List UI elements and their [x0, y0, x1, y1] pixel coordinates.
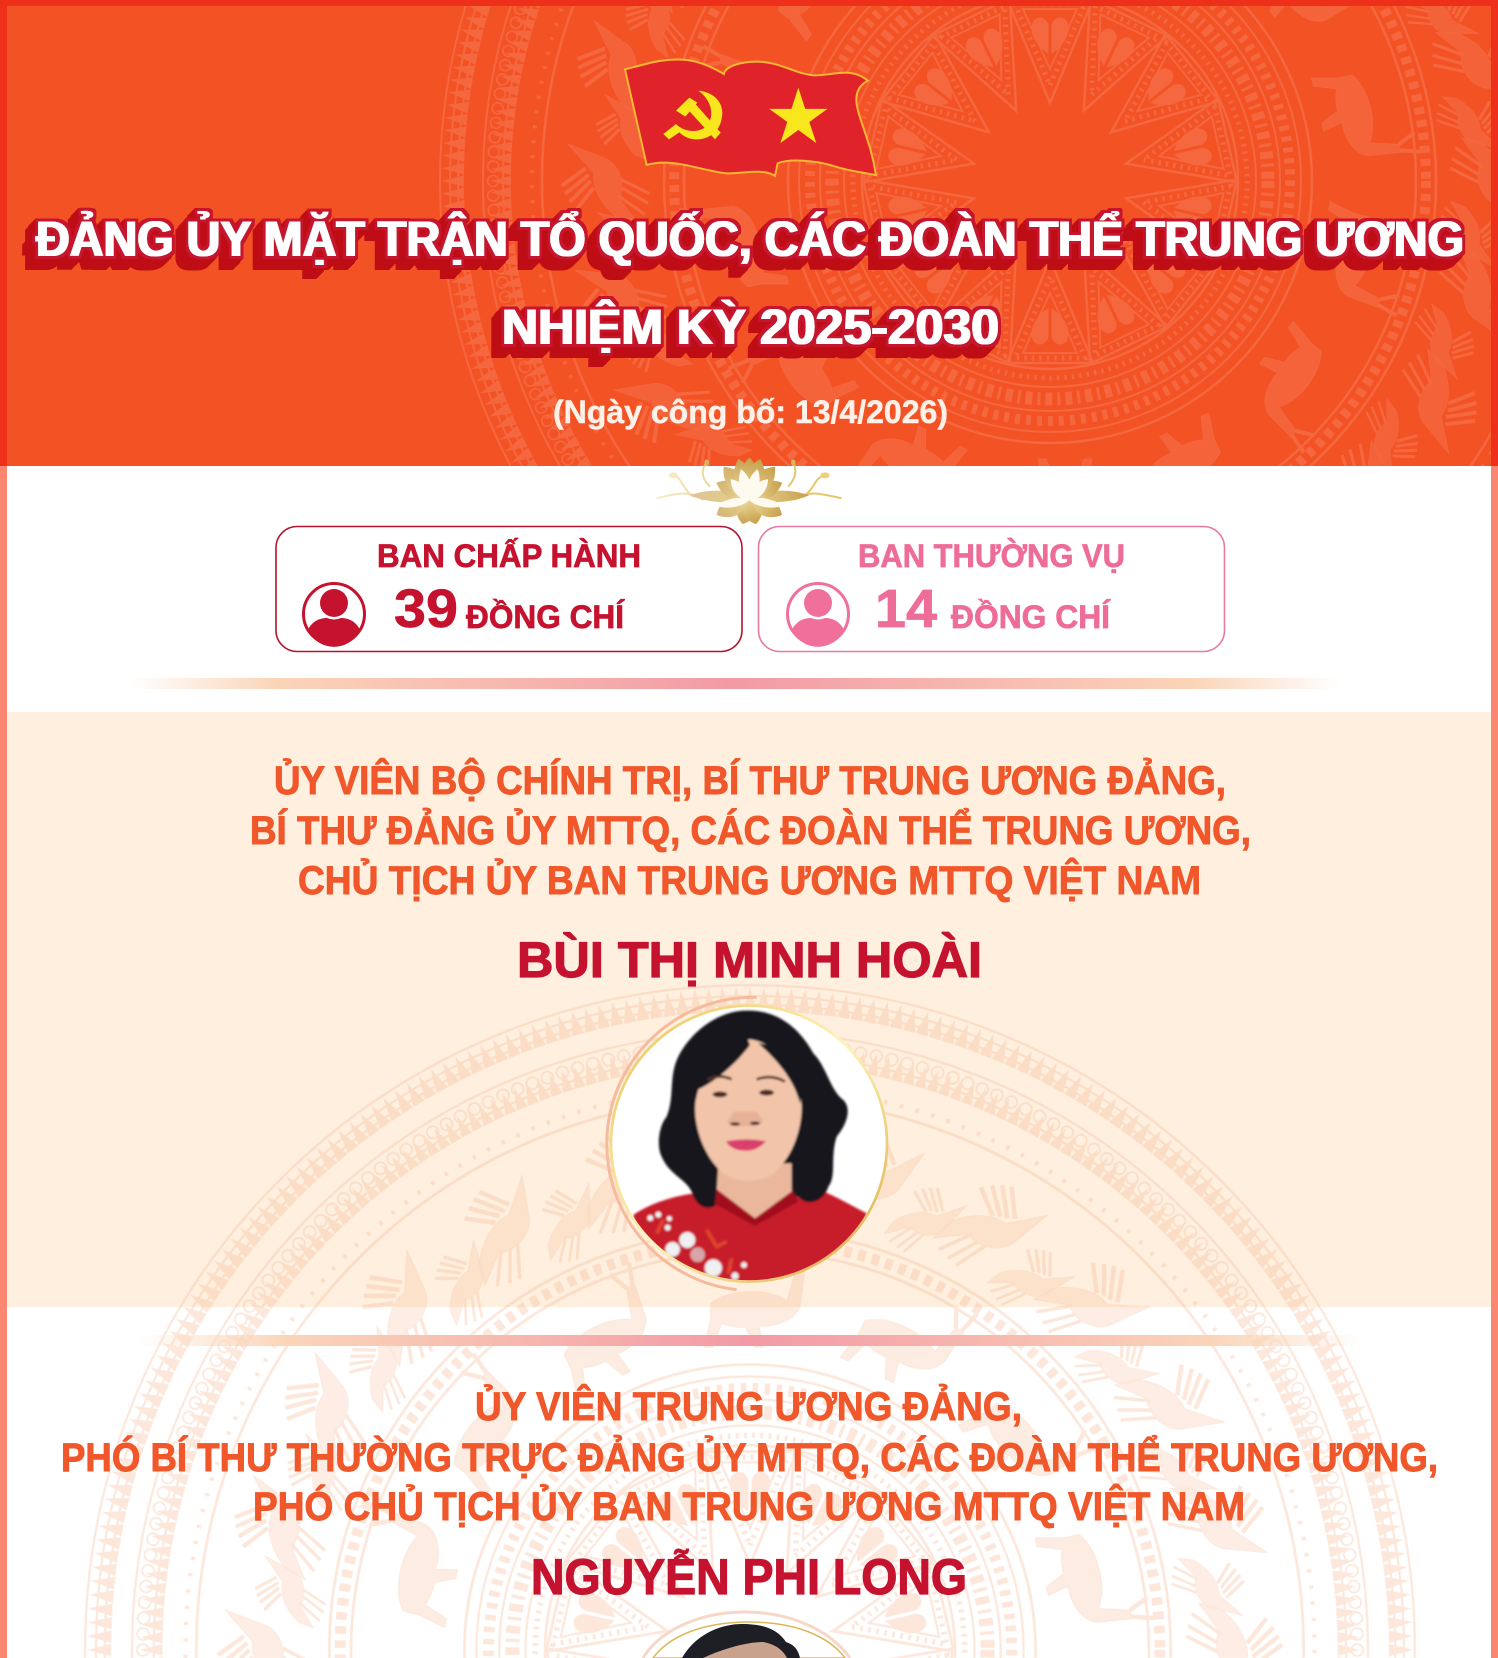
number: 39: 39: [394, 579, 458, 639]
drum pattern behind the portrait sections: [0, 712, 1498, 1658]
portrait: Nguyễn Phi Long: [643, 1612, 850, 1658]
section 1 name: BÙI THỊ MINH HOÀI: [517, 932, 982, 988]
face: [695, 1039, 802, 1181]
panel: Ban Thường vụ: [758, 526, 1224, 652]
number: 14: 14: [875, 579, 937, 639]
icon: gold lotus: [650, 456, 850, 527]
panel: Ban Chấp hành: [276, 526, 742, 652]
section 1 role text: BÍ THƯ ĐẢNG ỦY MTTQ, CÁC ĐOÀN THỂ TRUNG ƯƠNG,: [250, 806, 1251, 853]
label: đồng chí: ĐỒNG CHÍ: [951, 599, 1111, 635]
icon: person: [304, 584, 364, 647]
date line: (Ngày công bố: 13/4/2026): [553, 394, 948, 430]
icon: party flag: [625, 59, 876, 176]
dress: [632, 1190, 868, 1280]
section 1 role text: [250, 757, 1251, 903]
section 2 role text: [61, 1383, 1438, 1529]
section 2 role text: ỦY VIÊN TRUNG ƯƠNG ĐẢNG,: [475, 1383, 1022, 1429]
heading: Ban Chấp hành: BAN CHẤP HÀNH: [377, 538, 641, 574]
neck: [717, 1163, 792, 1222]
divider: [138, 1335, 1362, 1346]
section 2 role text: PHÓ CHỦ TỊCH ỦY BAN TRUNG ƯƠNG MTTQ VIỆT NAM: [253, 1483, 1245, 1529]
label: đồng chí: ĐỒNG CHÍ: [466, 599, 625, 635]
hair: [659, 1011, 848, 1208]
embroidery: [647, 1212, 747, 1280]
page side borders: [0, 466, 1498, 1658]
title: NHIỆM KỲ 2025-2030: [502, 299, 999, 355]
portrait: Bùi Thị Minh Hoài: [607, 997, 887, 1297]
heading: Ban Thường vụ: BAN THƯỜNG VỤ: [858, 538, 1125, 574]
icon: person: [788, 584, 848, 647]
divider: [130, 678, 1340, 689]
section 2 name: NGUYỄN PHI LONG: [531, 1549, 967, 1605]
section 1 role text: CHỦ TỊCH ỦY BAN TRUNG ƯƠNG MTTQ VIỆT NAM: [298, 857, 1201, 903]
header panel: [0, 0, 1498, 466]
section 1 role text: ỦY VIÊN BỘ CHÍNH TRỊ, BÍ THƯ TRUNG ƯƠNG ĐẢNG,: [274, 757, 1226, 803]
panel: peach section background: [0, 712, 1498, 1307]
title: [36, 210, 1464, 355]
